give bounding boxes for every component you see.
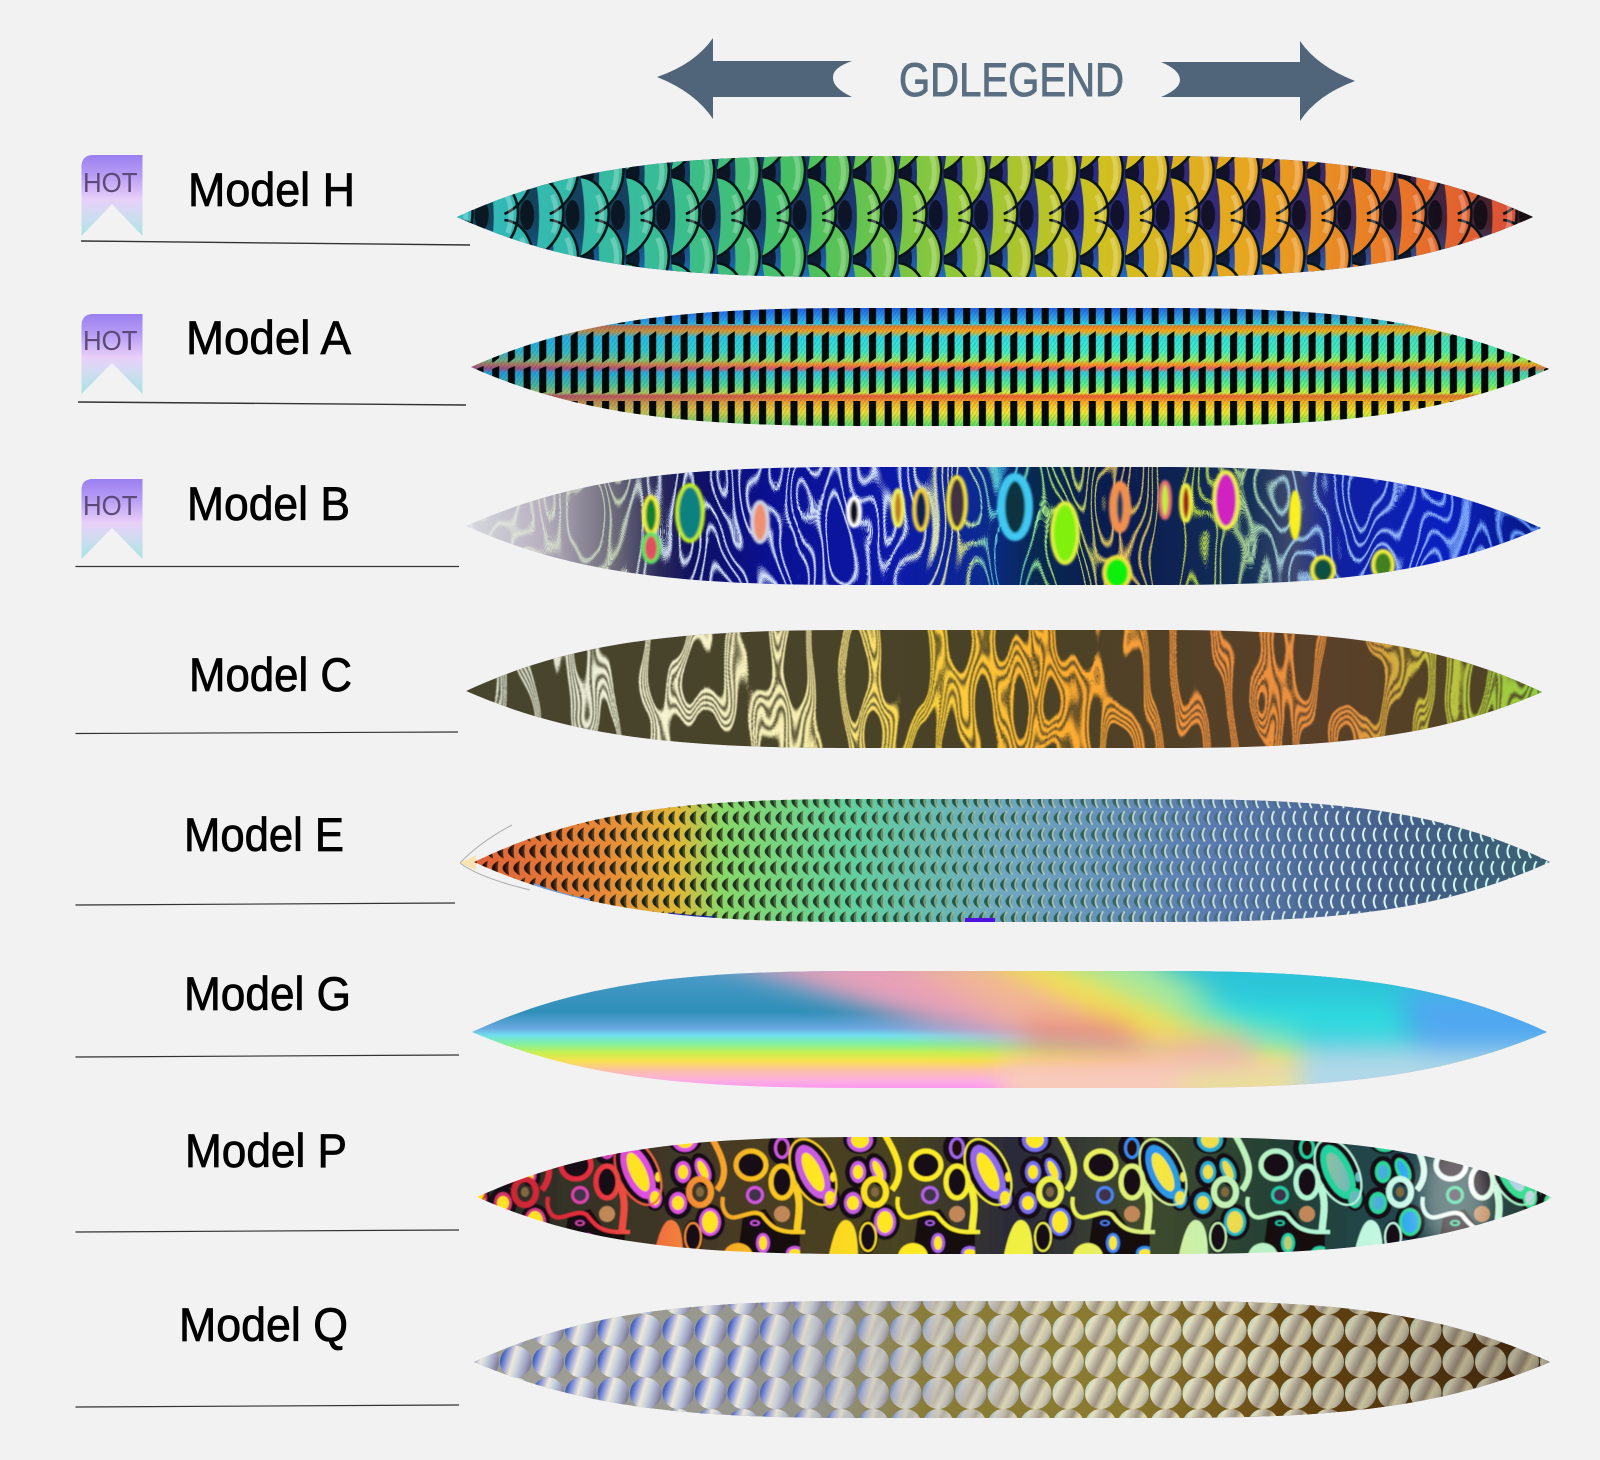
badge: HOT: HOT <box>83 167 138 198</box>
title: GDLEGEND: GDLEGEND <box>899 53 1124 106</box>
label: Model G: Model G <box>184 967 351 1020</box>
row: Model E <box>76 795 1555 927</box>
badge: HOT: HOT <box>83 325 138 356</box>
label: Model C: Model C <box>189 648 352 701</box>
label: Model E: Model E <box>184 808 344 861</box>
arrow: right <box>1161 41 1355 121</box>
row: Model B <box>76 467 1541 585</box>
badge: HOT <box>82 314 142 394</box>
row: Model C <box>76 625 1550 755</box>
lure: Model B damascus film <box>466 467 1541 585</box>
arrow: left <box>657 38 852 119</box>
row: Model P <box>76 1132 1552 1254</box>
lure: Model G rainbow film <box>472 971 1547 1088</box>
label: Model Q: Model Q <box>179 1298 348 1351</box>
label: Model B: Model B <box>187 477 350 530</box>
row: Model G <box>76 971 1547 1088</box>
label: Model P: Model P <box>185 1124 347 1177</box>
lure: Model Q circle film <box>474 1301 1550 1418</box>
label: Model A: Model A <box>186 311 352 364</box>
lure: Model P blob film <box>477 1137 1552 1254</box>
row: Model A <box>78 300 1555 430</box>
row: Model Q <box>76 1301 1550 1418</box>
lure: Model A zigzag film <box>471 308 1549 426</box>
label: Model H: Model H <box>188 163 355 216</box>
badge: HOT: HOT <box>83 490 138 521</box>
lure: Model H scale film <box>450 150 1540 282</box>
row: Model H <box>81 150 1540 282</box>
badge: HOT <box>82 479 142 559</box>
badge: HOT <box>82 155 142 236</box>
lure: Model E fine scale film <box>460 795 1555 927</box>
brand header with arrows <box>657 38 1355 121</box>
lure: Model C damascus film <box>466 630 1542 748</box>
